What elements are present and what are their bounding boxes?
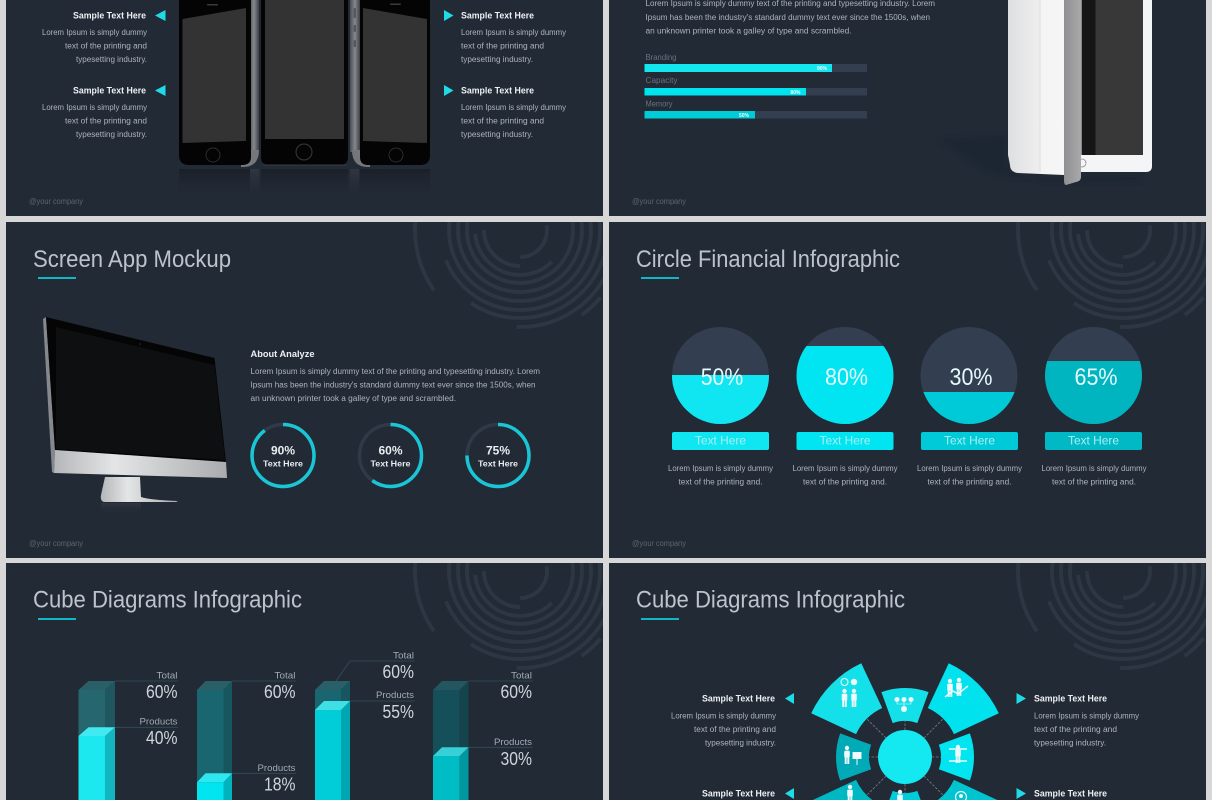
donut: 75%: Text Here	[478, 458, 518, 468]
title: Circle Financial Infographic	[636, 246, 900, 273]
slide: screen app mockup	[6, 222, 603, 558]
cube column 4: Total	[511, 670, 532, 682]
column: 80%: 80%	[825, 364, 868, 391]
text block: right bottom: Sample Text Here	[461, 86, 534, 96]
column: 80%: Lorem Ipsum is simply dummy	[792, 464, 898, 473]
title: Cube Diagrams Infographic	[636, 586, 905, 614]
column: 65%	[1042, 327, 1146, 486]
text block: right top	[1016, 693, 1139, 748]
column: 65%: 65%	[1074, 364, 1118, 391]
decorative rings	[975, 82, 1212, 378]
text block: right top: typesetting industry.	[461, 55, 533, 64]
text block: left top	[671, 693, 794, 748]
text block: left top: Sample Text Here	[73, 10, 146, 20]
donut: 60%: Text Here	[370, 458, 411, 468]
cube column 1: Products	[140, 716, 178, 728]
text block: description: Ipsum has been the industry's standard dummy text ever since the 1500s, when	[250, 380, 536, 390]
image: tablet with cover	[938, 0, 1152, 185]
column: 30%: 30%	[950, 364, 992, 391]
slide: tablet mockup	[609, 0, 1206, 216]
text block: left top: text of the printing and	[65, 42, 147, 50]
column: 50%: Text Here	[695, 434, 746, 448]
donut: 90%	[252, 424, 314, 486]
footer: @your company	[29, 539, 83, 548]
cube column 1: Total	[156, 670, 178, 682]
cube column 3: 60%	[382, 662, 414, 682]
text block: right top: typesetting industry.	[1034, 738, 1106, 748]
text block: description	[646, 0, 935, 36]
text block: left bottom	[42, 85, 166, 139]
slide: phone mockup	[6, 0, 603, 216]
text block: left bottom: text of the printing and	[65, 116, 147, 126]
icon: choices with arrows	[949, 745, 967, 763]
decorative rings	[372, 82, 668, 378]
donut: 60%: 60%	[378, 444, 403, 458]
text block: right top: text of the printing and	[1034, 725, 1117, 734]
cube column 3	[315, 650, 414, 800]
image: three phones	[179, 0, 430, 200]
donut: 90%: 90%	[271, 444, 295, 458]
text block: left top: Sample Text Here	[702, 694, 775, 704]
text block: description: an unknown printer took a galley of type and scrambled.	[646, 26, 852, 36]
bar chart: capacity bars: 80%	[790, 90, 801, 96]
text block: right top: Sample Text Here	[1034, 694, 1107, 704]
column: 50%: Lorem Ipsum is simply dummy	[668, 464, 773, 473]
bar chart: capacity bars	[644, 53, 867, 119]
column: 30%: text of the printing and.	[928, 478, 1012, 486]
cube column 3: Products	[376, 690, 414, 701]
cube column 1: 60%	[146, 682, 178, 702]
donut: 75%: 75%	[486, 444, 510, 458]
cube column 4: 60%	[500, 682, 532, 702]
cube column 2: Total	[274, 670, 296, 682]
column: 30%: Lorem Ipsum is simply dummy	[917, 464, 1022, 473]
cube column 2	[197, 670, 296, 800]
text block: left bottom: Sample Text Here	[73, 86, 146, 96]
bar chart: capacity bars: 90%	[817, 66, 828, 72]
column: 30%	[917, 327, 1022, 486]
text block: left top: typesetting industry.	[705, 738, 776, 748]
text block: left top: Lorem Ipsum is simply dummy	[671, 712, 776, 720]
icon: growth chart with people	[945, 678, 968, 697]
bar chart: capacity bars: Capacity	[646, 76, 678, 85]
bar chart: capacity bars: 50%	[739, 113, 750, 119]
column: 80%	[792, 327, 898, 486]
cube column 2: 18%	[264, 774, 296, 794]
icon: target lower right	[956, 792, 966, 800]
cube column 2: 60%	[264, 682, 296, 702]
text block: description: Ipsum has been the industry's standard dummy text ever since the 1500s, when	[646, 13, 930, 22]
text block: right bottom: typesetting industry.	[461, 130, 533, 139]
icon: team hierarchy	[894, 697, 914, 712]
footer: @your company	[29, 197, 83, 206]
donut: 90%: Text Here	[263, 458, 303, 468]
heading: About Analyze	[250, 349, 314, 359]
column: 50%: 50%	[701, 364, 743, 391]
cube column 4	[433, 670, 532, 800]
slide: radial cube diagram	[609, 563, 1206, 800]
text block: right bottom: Lorem Ipsum is simply dummy	[461, 103, 566, 112]
column: 50%	[668, 327, 773, 486]
cube column 4: Products	[494, 737, 532, 748]
image: desktop monitor	[43, 317, 227, 515]
decorative rings	[372, 423, 668, 719]
text block: right top	[444, 10, 566, 64]
column: 80%: Text Here	[820, 434, 871, 448]
text block: left bottom: Sample Text Here	[702, 788, 775, 798]
bar chart: capacity bars: Memory	[646, 100, 672, 108]
text block: right bottom: text of the printing and	[461, 116, 544, 126]
text block: left top	[42, 10, 166, 64]
footer: @your company	[632, 539, 686, 548]
slide: cube diagrams chart	[6, 563, 603, 800]
text block: right top: Lorem Ipsum is simply dummy	[1034, 712, 1139, 720]
column: 65%: text of the printing and.	[1052, 478, 1136, 486]
column: 65%: Lorem Ipsum is simply dummy	[1042, 464, 1146, 473]
text block: description: an unknown printer took a galley of type and scrambled.	[250, 394, 456, 403]
text block: description	[250, 367, 540, 403]
decorative rings	[975, 423, 1212, 719]
cube column 1	[78, 670, 178, 800]
text block: left top: text of the printing and	[694, 725, 776, 734]
text block: left top: typesetting industry.	[76, 55, 147, 64]
radial diagram	[811, 663, 999, 800]
cube column 1: 40%	[146, 728, 178, 748]
column: 30%: Text Here	[944, 434, 995, 448]
text block: left bottom: typesetting industry.	[76, 130, 147, 139]
title: Cube Diagrams Infographic	[33, 586, 302, 614]
bar chart: capacity bars: Branding	[646, 53, 676, 62]
footer: @your company	[632, 197, 686, 206]
column: 65%: Text Here	[1068, 434, 1119, 448]
text block: right bottom: Sample Text Here	[1034, 788, 1107, 798]
text block: left bottom: Lorem Ipsum is simply dummy	[42, 103, 147, 112]
text block: description: Lorem Ipsum is simply dummy text of the printing and typesetting industry. Lorem	[250, 367, 540, 376]
cube column 2: Products	[258, 763, 296, 774]
text block: right bottom	[444, 85, 566, 139]
title: Screen App Mockup	[33, 246, 231, 273]
column: 50%: text of the printing and.	[678, 478, 762, 486]
icon: presenter at board	[844, 746, 862, 765]
cube column 3: Total	[393, 650, 414, 662]
text block: left top: Lorem Ipsum is simply dummy	[42, 28, 147, 37]
icon: person lower left	[847, 785, 853, 800]
donut: 60%	[360, 424, 422, 486]
text block: right top: Sample Text Here	[461, 10, 534, 20]
text block: right top: text of the printing and	[461, 42, 544, 50]
icon: two people with gears	[841, 678, 857, 707]
donut: 75%	[467, 424, 529, 486]
text block: right top: Lorem Ipsum is simply dummy	[461, 28, 566, 37]
cube column 3: 55%	[382, 702, 414, 722]
slide: circle financial infographic	[609, 222, 1206, 558]
cube column 4: 30%	[500, 749, 532, 769]
icon: person bottom	[897, 790, 903, 800]
column: 80%: text of the printing and.	[803, 478, 887, 486]
